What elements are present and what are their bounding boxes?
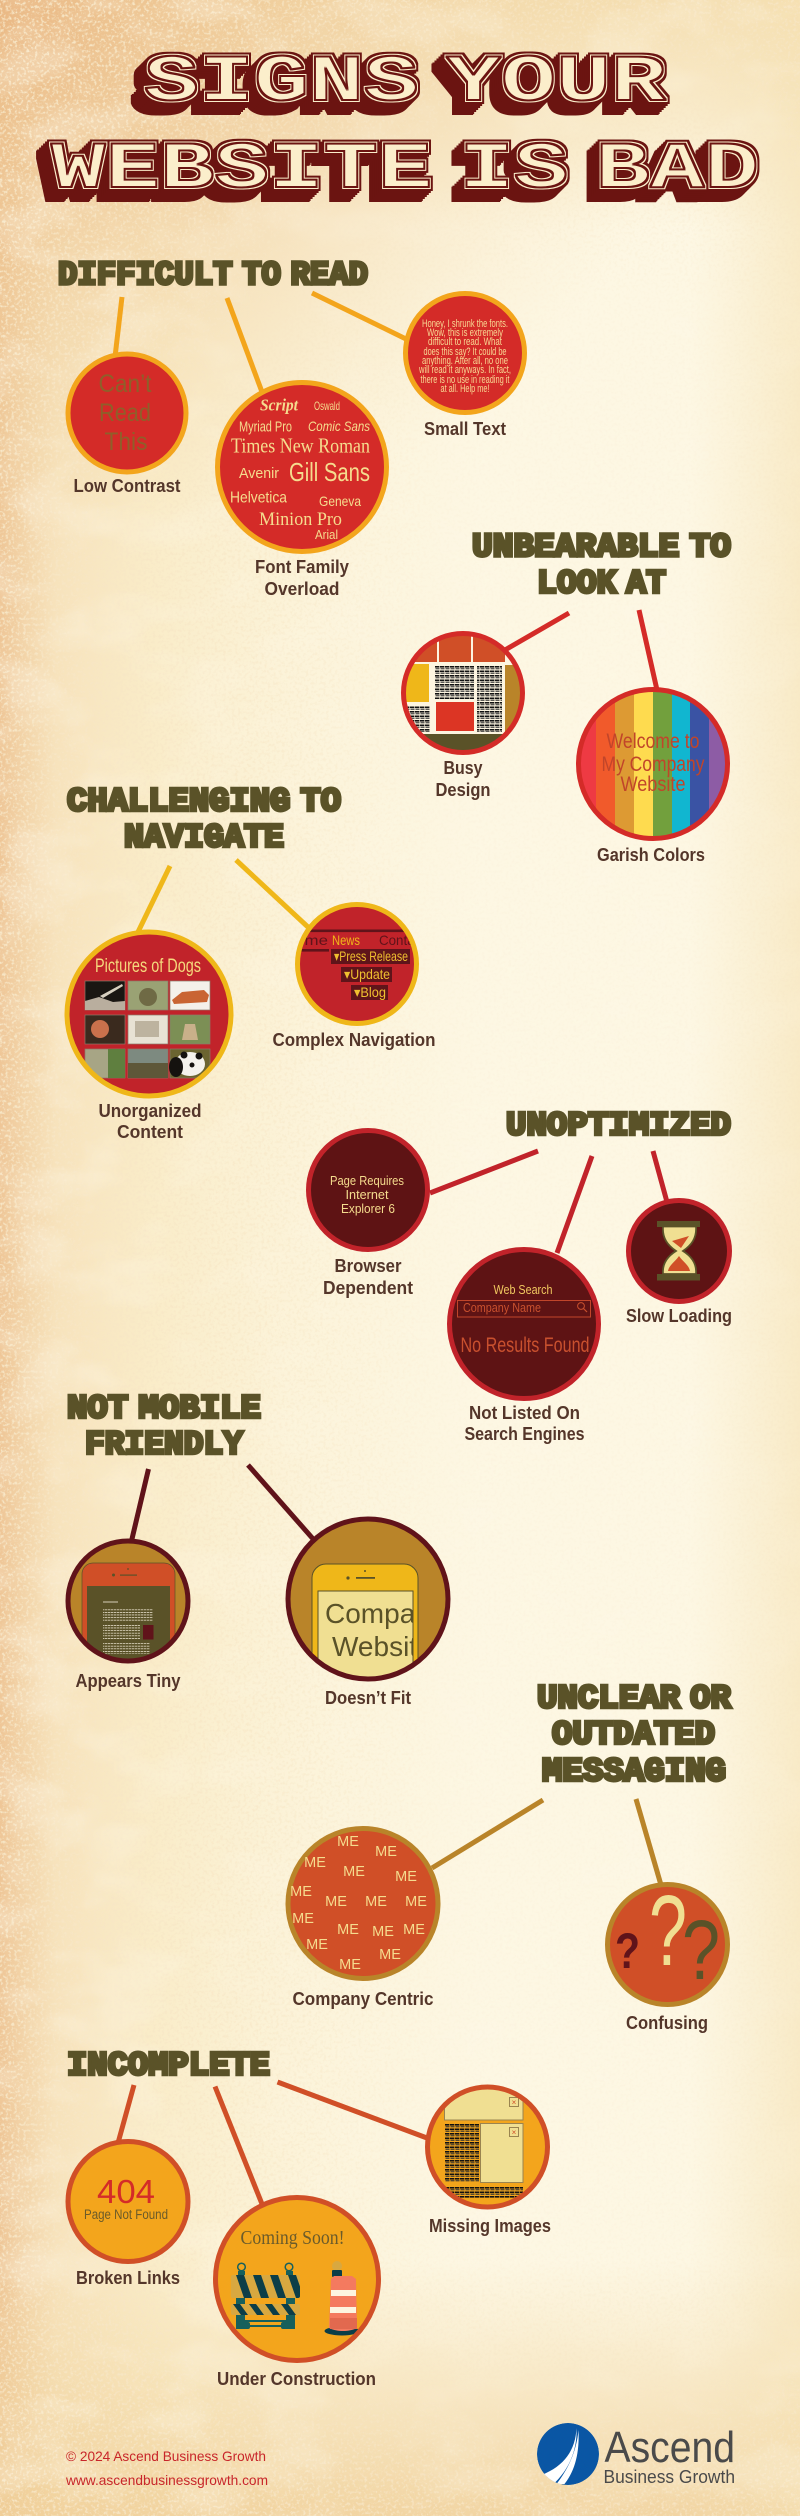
label: busy design	[436, 758, 490, 800]
icon: broken links circle: Page Not Found	[84, 2207, 168, 2222]
icon: unorganized content circle	[67, 932, 231, 1096]
footer: copyright and url: www.ascendbusinessgrowth.com	[65, 2472, 268, 2488]
icon: company centric circle: ME	[395, 1869, 417, 1885]
label: doesn't fit: Doesn’t Fit	[325, 1688, 411, 1708]
icon: unorganized content circle: Pictures of Dogs	[95, 956, 201, 977]
icon: complex navigation circle: ▾Update	[344, 966, 390, 982]
icon: font family overload circle: Oswald	[314, 399, 340, 413]
icon: garish colors circle: My Company	[602, 753, 705, 776]
panel: unclear or outdated messaging	[288, 1680, 731, 2033]
footer: copyright and url	[65, 2448, 268, 2488]
icon: company centric circle: ME	[325, 1894, 347, 1910]
icon: missing images circle: ×	[512, 2098, 517, 2107]
icon: complex navigation circle: Contact	[379, 932, 425, 948]
icon: small text circle: difficult to read. What	[428, 336, 502, 348]
icon: missing images circle	[428, 2085, 548, 2207]
label: browser dependent: Dependent	[323, 1278, 413, 1298]
label: not listed on search engines	[464, 1403, 584, 1444]
icon: complex navigation circle	[283, 904, 425, 1024]
icon: small text circle: at all. Help me!	[440, 383, 490, 395]
logo: Ascend Business Growth: Ascend	[604, 2423, 735, 2472]
icon: font family overload circle: Avenir	[239, 465, 279, 482]
panel: not mobile friendly	[67, 1390, 448, 1708]
icon: appears tiny phone circle	[68, 1541, 188, 1673]
icon: company centric circle: ME	[337, 1834, 359, 1850]
arrow: to under construction	[215, 2086, 262, 2204]
icon: missing images circle: ×	[512, 2128, 517, 2137]
heading: unbearable to look at: LOOK AT	[537, 566, 666, 602]
arrow: to broken links	[118, 2085, 134, 2143]
icon: garish colors circle: Welcome to	[606, 730, 700, 753]
heading: unclear or outdated messaging: UNCLEAR OR	[537, 1680, 731, 1718]
icon: under construction circle	[216, 2198, 378, 2360]
icon: not listed on search engines circle	[450, 1250, 598, 1398]
label: missing images: Missing Images	[429, 2216, 551, 2236]
heading: not mobile friendly: FRIENDLY	[85, 1426, 243, 1464]
icon: font family overload circle: Minion Pro	[259, 509, 342, 530]
icon: browser dependent circle: Page Requires	[330, 1173, 404, 1188]
icon: company centric circle: ME	[290, 1884, 312, 1900]
icon: low contrast circle	[68, 354, 186, 472]
label: low contrast: Low Contrast	[74, 476, 181, 496]
icon: font family overload circle: Gill Sans	[289, 457, 370, 487]
label: confusing: Confusing	[626, 2013, 708, 2033]
icon: not listed on search engines circle: Web Search	[494, 1282, 552, 1297]
label: unorganized content	[98, 1101, 202, 1142]
icon: complex navigation circle: ▾Blog	[354, 984, 386, 1000]
label: broken links: Broken Links	[76, 2268, 180, 2288]
label: font family overload: Font Family	[255, 557, 349, 577]
icon: doesn't fit phone circle: Company	[325, 1598, 445, 1629]
icon: company centric circle: ME	[292, 1911, 314, 1927]
icon: company centric circle: ME	[304, 1855, 326, 1871]
label: garish colors: Garish Colors	[597, 845, 705, 865]
arrow: to garish colors	[639, 610, 657, 690]
icon: company centric circle: ME	[403, 1922, 425, 1938]
icon: font family overload circle: Times New Roman	[231, 434, 370, 458]
arrow: to appears tiny	[132, 1469, 148, 1541]
label: browser dependent: Browser	[334, 1256, 402, 1276]
icon: busy design circle	[401, 631, 525, 755]
arrow: to busy design	[505, 613, 569, 650]
label: busy design: Design	[436, 780, 490, 800]
icon: font family overload circle: Script	[260, 396, 299, 414]
arrow: to confusing	[636, 1799, 661, 1885]
icon: small text circle	[406, 294, 524, 412]
icon: low contrast circle: Read	[99, 399, 151, 427]
icon: company centric circle: ME	[372, 1924, 394, 1940]
label: company centric: Company Centric	[292, 1989, 434, 2009]
icon: complex navigation circle: News	[332, 932, 360, 948]
icon: small text circle: does this say? It could be	[424, 346, 506, 358]
label: not listed on search engines: Not Listed On	[469, 1403, 580, 1423]
icon: company centric circle: ME	[339, 1957, 361, 1973]
heading: unbearable to look at	[472, 529, 731, 602]
icon: small text circle: Wow, this is extremely	[427, 327, 503, 339]
icon: not listed on search engines circle: No Results Found	[460, 1334, 590, 1357]
label: complex navigation: Complex Navigation	[272, 1030, 436, 1050]
icon: low contrast circle: Can’t	[98, 370, 152, 398]
icon: garish colors circle: Website	[620, 773, 686, 796]
label: unorganized content: Content	[117, 1122, 183, 1142]
icon: company centric circle: ME	[337, 1922, 359, 1938]
footer: copyright and url: © 2024 Ascend Business Growth	[66, 2448, 266, 2464]
icon: complex navigation circle: ▾Press Release	[334, 948, 408, 964]
icon: company centric circle: ME	[379, 1947, 401, 1963]
heading: not mobile friendly: NOT MOBILE	[67, 1390, 261, 1428]
arrow: to slow loading	[653, 1151, 667, 1202]
title: WEBSITE IS BAD	[51, 132, 759, 207]
arrow: to low contrast	[115, 297, 122, 357]
icon: company centric circle: ME	[306, 1937, 328, 1953]
icon: confusing question marks circle: ?	[649, 1875, 687, 1987]
arrow: to missing images	[278, 2082, 427, 2138]
label: browser dependent	[323, 1256, 413, 1298]
panel: challenging to navigate	[67, 784, 436, 1142]
icon: font family overload circle: Myriad Pro	[239, 418, 292, 436]
arrow: to unorganized content	[138, 866, 170, 932]
label: busy design: Busy	[444, 758, 482, 778]
icon: doesn't fit phone circle	[288, 1519, 448, 1694]
icon: small text circle: will read it anyways. In fact,	[418, 364, 511, 376]
heading: incomplete: INCOMPLETE	[67, 2048, 270, 2084]
icon: not listed on search engines circle: Company Name	[463, 1300, 541, 1315]
label: font family overload: Overload	[264, 579, 340, 599]
arrow: to not listed on search engines	[557, 1156, 592, 1253]
label: unorganized content: Unorganized	[98, 1101, 202, 1121]
icon: broken links circle: 404	[97, 2173, 155, 2210]
icon: complex navigation circle: Home	[283, 932, 328, 948]
icon: under construction circle: Coming Soon!	[240, 2227, 344, 2249]
arrow: to small text	[312, 293, 406, 339]
arrow: to browser dependent	[430, 1151, 538, 1193]
barricade	[231, 2263, 304, 2329]
arrow: to complex navigation	[236, 860, 309, 928]
heading: unbearable to look at: UNBEARABLE TO	[472, 529, 731, 566]
picture grid	[85, 981, 210, 1078]
icon: broken links circle	[68, 2142, 188, 2262]
icon: doesn't fit phone circle: Website	[332, 1631, 433, 1662]
heading: unclear or outdated messaging	[537, 1680, 731, 1790]
label: not listed on search engines: Search Engines	[464, 1424, 584, 1444]
logo: Ascend Business Growth	[537, 2423, 735, 2487]
icon: small text circle: Honey, I shrunk the fonts.	[422, 318, 508, 330]
heading: difficult to read: DIFFICULT TO READ	[58, 257, 368, 294]
label: small text: Small Text	[424, 419, 506, 439]
icon: small text circle: anything. After all, no one	[422, 355, 508, 367]
icon: browser dependent circle: Internet	[346, 1187, 389, 1202]
icon: small text circle: there is no use in reading it	[420, 374, 510, 386]
icon: garish colors circle	[575, 688, 731, 840]
heading: challenging to navigate	[67, 784, 341, 856]
panel: difficult to read	[58, 257, 524, 599]
heading: unclear or outdated messaging: MESSAGING	[542, 1754, 726, 1790]
icon: browser dependent circle	[308, 1130, 428, 1250]
icon: font family overload circle: Comic Sans	[308, 418, 370, 434]
heading: not mobile friendly	[67, 1390, 261, 1464]
icon: slow loading hourglass circle	[628, 1200, 730, 1302]
heading: unclear or outdated messaging: OUTDATED	[552, 1716, 715, 1754]
arrow: to company centric	[432, 1800, 543, 1868]
arrow: to font family overload	[227, 298, 262, 392]
label: font family overload	[255, 557, 349, 599]
heading: challenging to navigate: CHALLENGING TO	[67, 784, 341, 820]
arrow: to doesn't fit	[248, 1465, 314, 1540]
panel: incomplete	[67, 2048, 551, 2389]
label: slow loading: Slow Loading	[626, 1306, 732, 1326]
logo mark	[537, 2423, 599, 2485]
icon: company centric circle	[288, 1828, 438, 1978]
label: appears tiny: Appears Tiny	[76, 1671, 180, 1691]
traffic barrel	[324, 2261, 360, 2336]
icon: low contrast circle: This	[104, 428, 148, 456]
icon: company centric circle: ME	[343, 1864, 365, 1880]
icon: font family overload circle	[218, 382, 386, 552]
heading: challenging to navigate: NAVIGATE	[124, 820, 284, 856]
icon: company centric circle: ME	[375, 1844, 397, 1860]
icon: company centric circle: ME	[365, 1894, 387, 1910]
icon: confusing question marks circle	[608, 1875, 728, 2004]
icon: font family overload circle: Helvetica	[230, 490, 287, 506]
logo: Ascend Business Growth: Business Growth	[604, 2467, 735, 2487]
icon: confusing question marks circle: ?	[615, 1923, 640, 1979]
icon: company centric circle: ME	[405, 1894, 427, 1910]
heading: unoptimized: UNOPTIMIZED	[506, 1108, 731, 1144]
icon: browser dependent circle: Explorer 6	[341, 1201, 395, 1216]
icon: confusing question marks circle: ?	[682, 1903, 720, 1997]
icon: font family overload circle: Arial	[315, 527, 338, 542]
title	[51, 45, 759, 207]
panel: unoptimized	[308, 1108, 732, 1444]
icon: font family overload circle: Geneva	[319, 493, 361, 509]
label: under construction: Under Construction	[217, 2369, 376, 2389]
title: SIGNS YOUR	[144, 45, 667, 120]
panel: unbearable to look at	[400, 529, 731, 865]
